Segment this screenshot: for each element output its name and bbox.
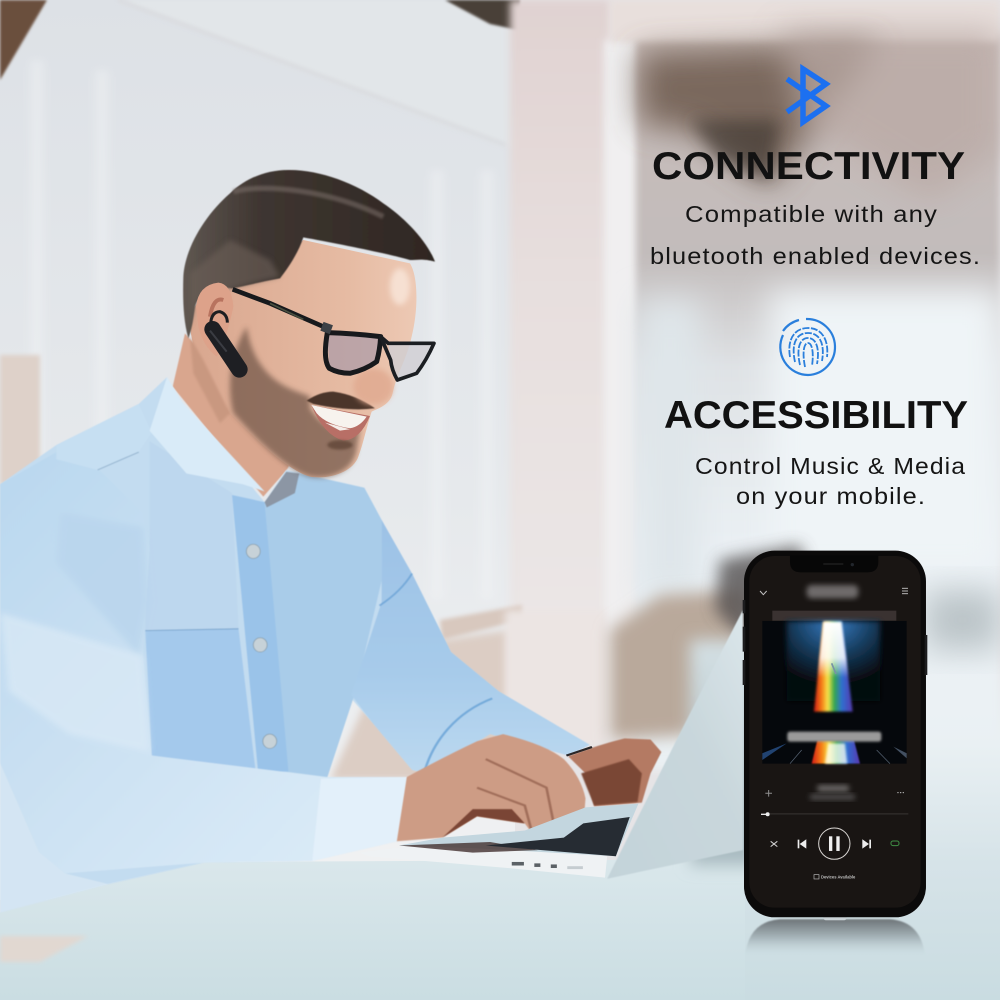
head: [183, 170, 435, 477]
ear: [196, 283, 233, 357]
ports: [512, 862, 583, 869]
heading: connectivity: CONNECTIVITY: [652, 145, 965, 188]
headset earpiece: [210, 312, 239, 369]
text: connectivity description: [650, 201, 981, 269]
phone reflection: [745, 919, 925, 957]
base: [360, 843, 607, 878]
track info: [817, 785, 849, 792]
screen lid: [607, 610, 743, 879]
beard: [230, 327, 360, 477]
blue shirt: [0, 377, 590, 913]
neck: [173, 333, 297, 497]
laptop: [360, 610, 743, 879]
nose: [353, 368, 393, 405]
mustache: [307, 392, 375, 409]
keyboard: [486, 817, 630, 856]
icon: fingerprint: [780, 319, 835, 375]
heading: accessibility: ACCESSIBILITY: [664, 394, 968, 437]
smartphone: [743, 551, 927, 957]
devices label: Devices Available: [821, 875, 856, 880]
top controls: [760, 591, 767, 595]
phone body: [744, 551, 926, 917]
album art: [762, 621, 907, 764]
desk surface: [0, 640, 1000, 1000]
hair: [183, 170, 435, 338]
text: connectivity description: bluetooth enabled devices.: [650, 243, 981, 269]
man: [0, 170, 661, 913]
screen: [749, 556, 921, 908]
text: accessibility description: on your mobile.: [736, 483, 926, 509]
text: accessibility description: [695, 453, 966, 509]
chin patch: [327, 440, 353, 450]
notch: [790, 555, 878, 572]
mouth: [311, 405, 370, 441]
glasses: [233, 289, 434, 380]
hands: [397, 734, 661, 847]
text: connectivity description: Compatible with any: [685, 201, 938, 227]
progress bar: [770, 813, 908, 815]
icon: bluetooth: [787, 69, 826, 122]
text: accessibility description: Control Music & Media: [695, 453, 966, 479]
playback controls: [771, 828, 899, 859]
